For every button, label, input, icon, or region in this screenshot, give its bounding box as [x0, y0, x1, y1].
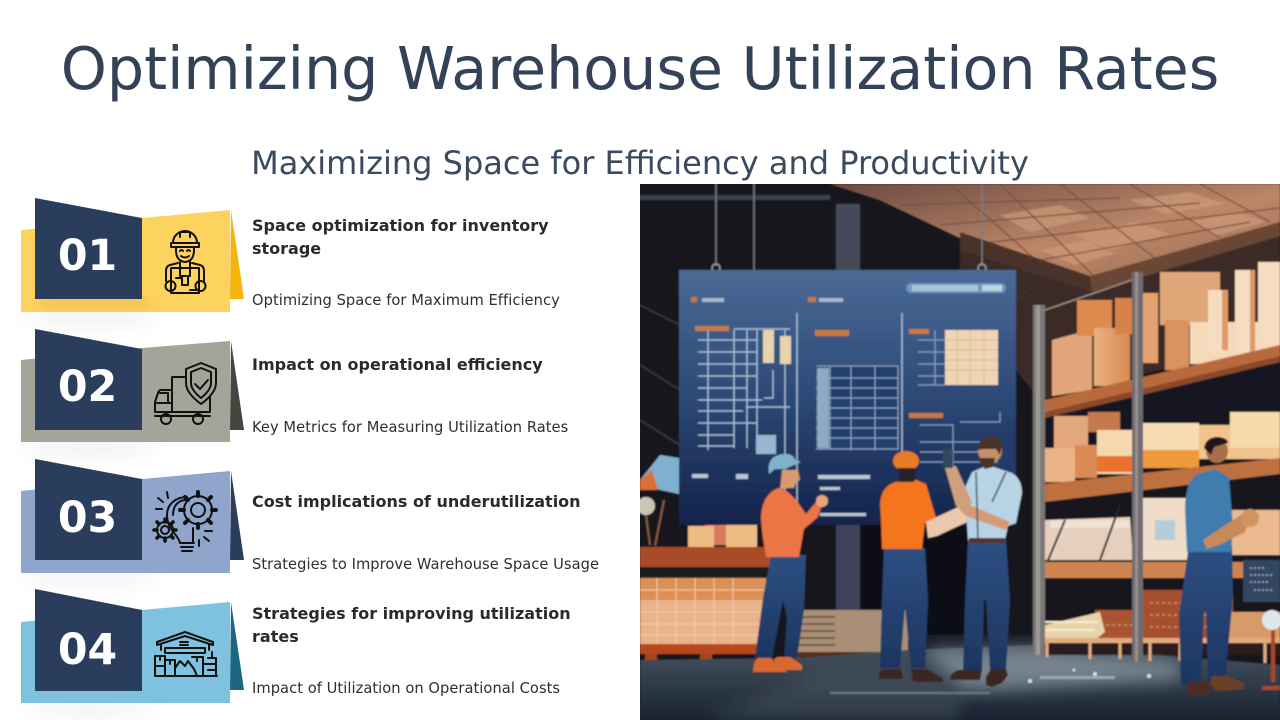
background wall: [630, 174, 1280, 720]
heading: item 1: storage: [252, 239, 321, 258]
suspension cables: [716, 184, 982, 270]
number 02: 02: [58, 362, 117, 412]
heading: item 1: Space optimization for inventory: [252, 216, 549, 235]
person 2: [879, 451, 972, 682]
dashboard board: [679, 270, 1016, 525]
person 1: [753, 454, 828, 672]
ribbon graphics: numbered badges and icons: [21, 198, 244, 709]
badge 4: [21, 589, 244, 715]
heading: item 4: Strategies for improving utilization: [252, 604, 571, 623]
round lamp stand: [1262, 610, 1280, 688]
badge 2: [21, 329, 244, 454]
number 03: 03: [58, 493, 117, 543]
icon: warehouse with boxes: [155, 632, 217, 676]
person 4: [1179, 437, 1259, 695]
text: item 2: Key Metrics for Measuring Utilization Rates: [252, 419, 568, 436]
icon: worker with hard hat: [166, 231, 206, 293]
ceiling panels: [830, 184, 1280, 282]
subtitle: Maximizing Space for Efficiency and Productivity: [251, 144, 1029, 182]
heading: item 4: rates: [252, 627, 299, 646]
badge 1: [21, 198, 244, 324]
number 04: 04: [58, 625, 117, 675]
icon: truck with shield: [155, 363, 216, 424]
heading: item 4: [252, 604, 571, 646]
number 01: 01: [58, 231, 117, 281]
text: item 1: Optimizing Space for Maximum Efficiency: [252, 292, 560, 309]
text: item 3: Strategies to Improve Warehouse Space Usage: [252, 556, 599, 573]
floor: [640, 645, 1280, 720]
heading: item 3: Cost implications of underutilization: [252, 492, 581, 511]
heading: item 2: Impact on operational efficiency: [252, 355, 543, 374]
text: item 4: Impact of Utilization on Operational Costs: [252, 680, 560, 697]
title: Optimizing Warehouse Utilization Rates: [61, 35, 1219, 103]
warehouse shelving with boxes: [1033, 262, 1280, 663]
left prop and counter: [640, 455, 679, 494]
icon: light bulb with gears: [154, 492, 216, 551]
person 3: [943, 437, 1022, 687]
illustration: warehouse workers reviewing a dashboard board: [640, 184, 1280, 720]
heading: item 1: [252, 216, 549, 258]
badge 3: [21, 459, 244, 585]
